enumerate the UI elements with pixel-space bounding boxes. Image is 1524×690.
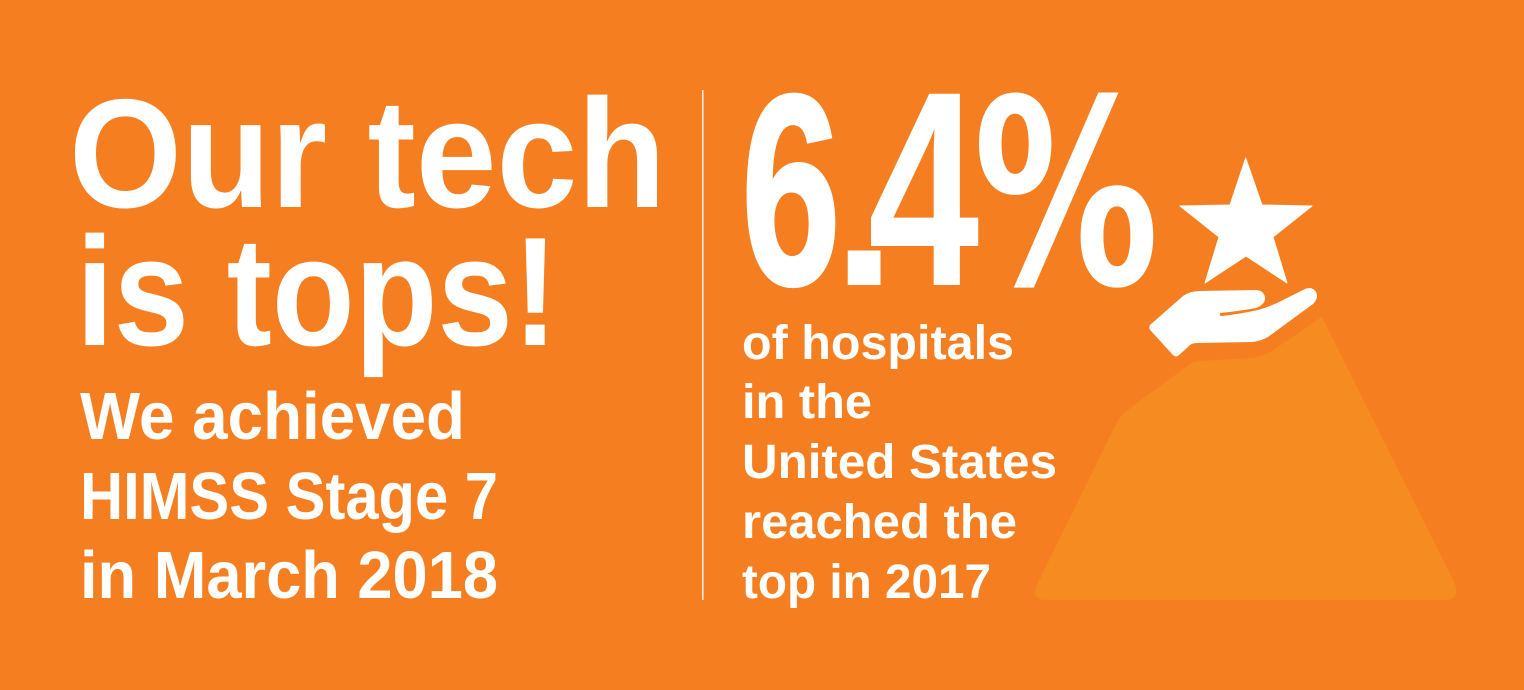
text block: hospitals description: in the bbox=[742, 376, 872, 429]
text block: HIMSS achievement: in March 2018 bbox=[80, 538, 498, 613]
text block: hospitals description bbox=[742, 317, 1057, 609]
statistic: 6.4%: % bbox=[973, 45, 1159, 346]
statistic: 6.4%: . bbox=[832, 76, 896, 335]
text block: hospitals description: reached the bbox=[742, 496, 1017, 549]
text block: HIMSS achievement: HIMSS Stage 7 bbox=[80, 459, 498, 534]
statistic: 6.4%: 4 bbox=[868, 35, 979, 345]
text block: hospitals description: of hospitals bbox=[742, 317, 1014, 370]
statistic: 6.4% bbox=[741, 35, 1159, 346]
text block: HIMSS achievement bbox=[80, 379, 498, 613]
statistic: 6.4%: 6 bbox=[741, 37, 841, 342]
text block: HIMSS achievement: We achieved bbox=[80, 379, 465, 454]
icon: star bbox=[1180, 158, 1312, 283]
text block: hospitals description: United States bbox=[742, 436, 1057, 489]
icon: hand bbox=[1149, 288, 1317, 356]
title: is tops! bbox=[76, 205, 558, 378]
title bbox=[69, 67, 666, 378]
title: Our tech bbox=[69, 67, 666, 240]
text block: hospitals description: top in 2017 bbox=[742, 556, 991, 609]
icon: mountain bbox=[1035, 317, 1456, 600]
